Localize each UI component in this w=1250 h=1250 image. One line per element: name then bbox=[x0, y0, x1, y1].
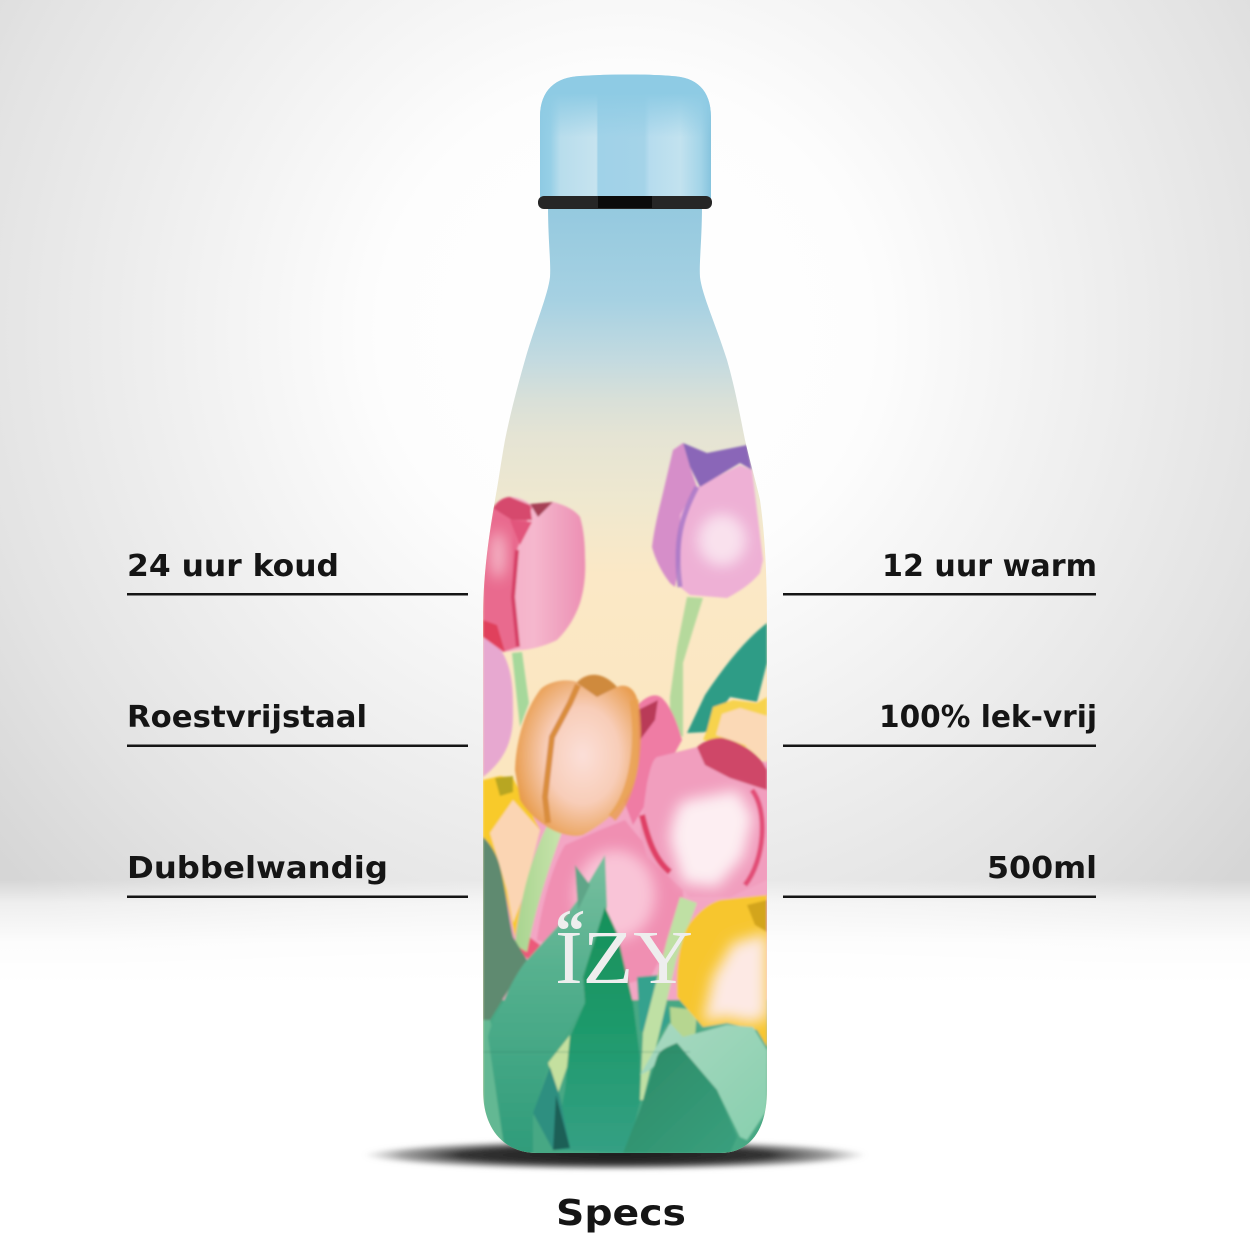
yellow tulip lower right bbox=[677, 895, 767, 1047]
teal patch beside stem bbox=[637, 975, 670, 1040]
spec: Roestvrijstaal: Roestvrijstaal bbox=[127, 700, 367, 735]
bottle body gradient bbox=[483, 205, 767, 1153]
black neck ring bbox=[538, 196, 712, 209]
pink tulip bottom centre bbox=[537, 820, 683, 985]
centre dark leaf bbox=[553, 907, 640, 1153]
artwork base fills bbox=[502, 760, 767, 1002]
brand logo bbox=[558, 910, 691, 983]
pink tulip back centre bbox=[620, 695, 682, 825]
red tulip bbox=[483, 497, 585, 652]
dark sliver bbox=[533, 1067, 565, 1149]
small leaf tip bbox=[575, 865, 590, 910]
spec: 24 uur koud: 24 uur koud bbox=[127, 549, 339, 584]
pale right leaf bbox=[640, 1023, 767, 1140]
far left edge leaf bbox=[483, 1019, 504, 1142]
light green leaf left bbox=[488, 855, 607, 1153]
spec: Dubbelwandig: Dubbelwandig bbox=[127, 851, 388, 886]
base lines bbox=[483, 1051, 690, 1053]
bottle cap bbox=[540, 74, 711, 200]
purple tulip bbox=[652, 443, 763, 598]
spec: 12 uur warm: 12 uur warm bbox=[882, 549, 1097, 584]
bottle bbox=[483, 74, 770, 1155]
bottle shadow bbox=[363, 1140, 867, 1170]
teal leaf back bbox=[687, 623, 767, 733]
tulip artwork bbox=[483, 443, 770, 1155]
spec: 500ml: 500ml bbox=[987, 851, 1097, 886]
pale leaf sliver bbox=[548, 1035, 570, 1093]
orange tulip bbox=[515, 675, 638, 836]
heading: Specs: Specs bbox=[556, 1193, 686, 1234]
yellow tulip back right bbox=[702, 696, 767, 752]
yellow tulip lower left bbox=[483, 776, 540, 937]
pink red tulip front bbox=[640, 738, 767, 897]
brand logo: IZY bbox=[555, 916, 693, 1000]
stem purple tulip bbox=[670, 597, 703, 737]
dark right leaf bbox=[623, 1043, 737, 1153]
brand logo: “ bbox=[555, 898, 585, 964]
dark grey-green leaf bbox=[483, 837, 527, 1023]
stem right bbox=[640, 897, 697, 1100]
pink tulip left edge bbox=[483, 638, 513, 777]
stem orange tulip bbox=[515, 826, 562, 952]
spec: 100% lek-vrij: 100% lek-vrij bbox=[879, 700, 1097, 735]
stem red tulip bbox=[512, 652, 529, 727]
